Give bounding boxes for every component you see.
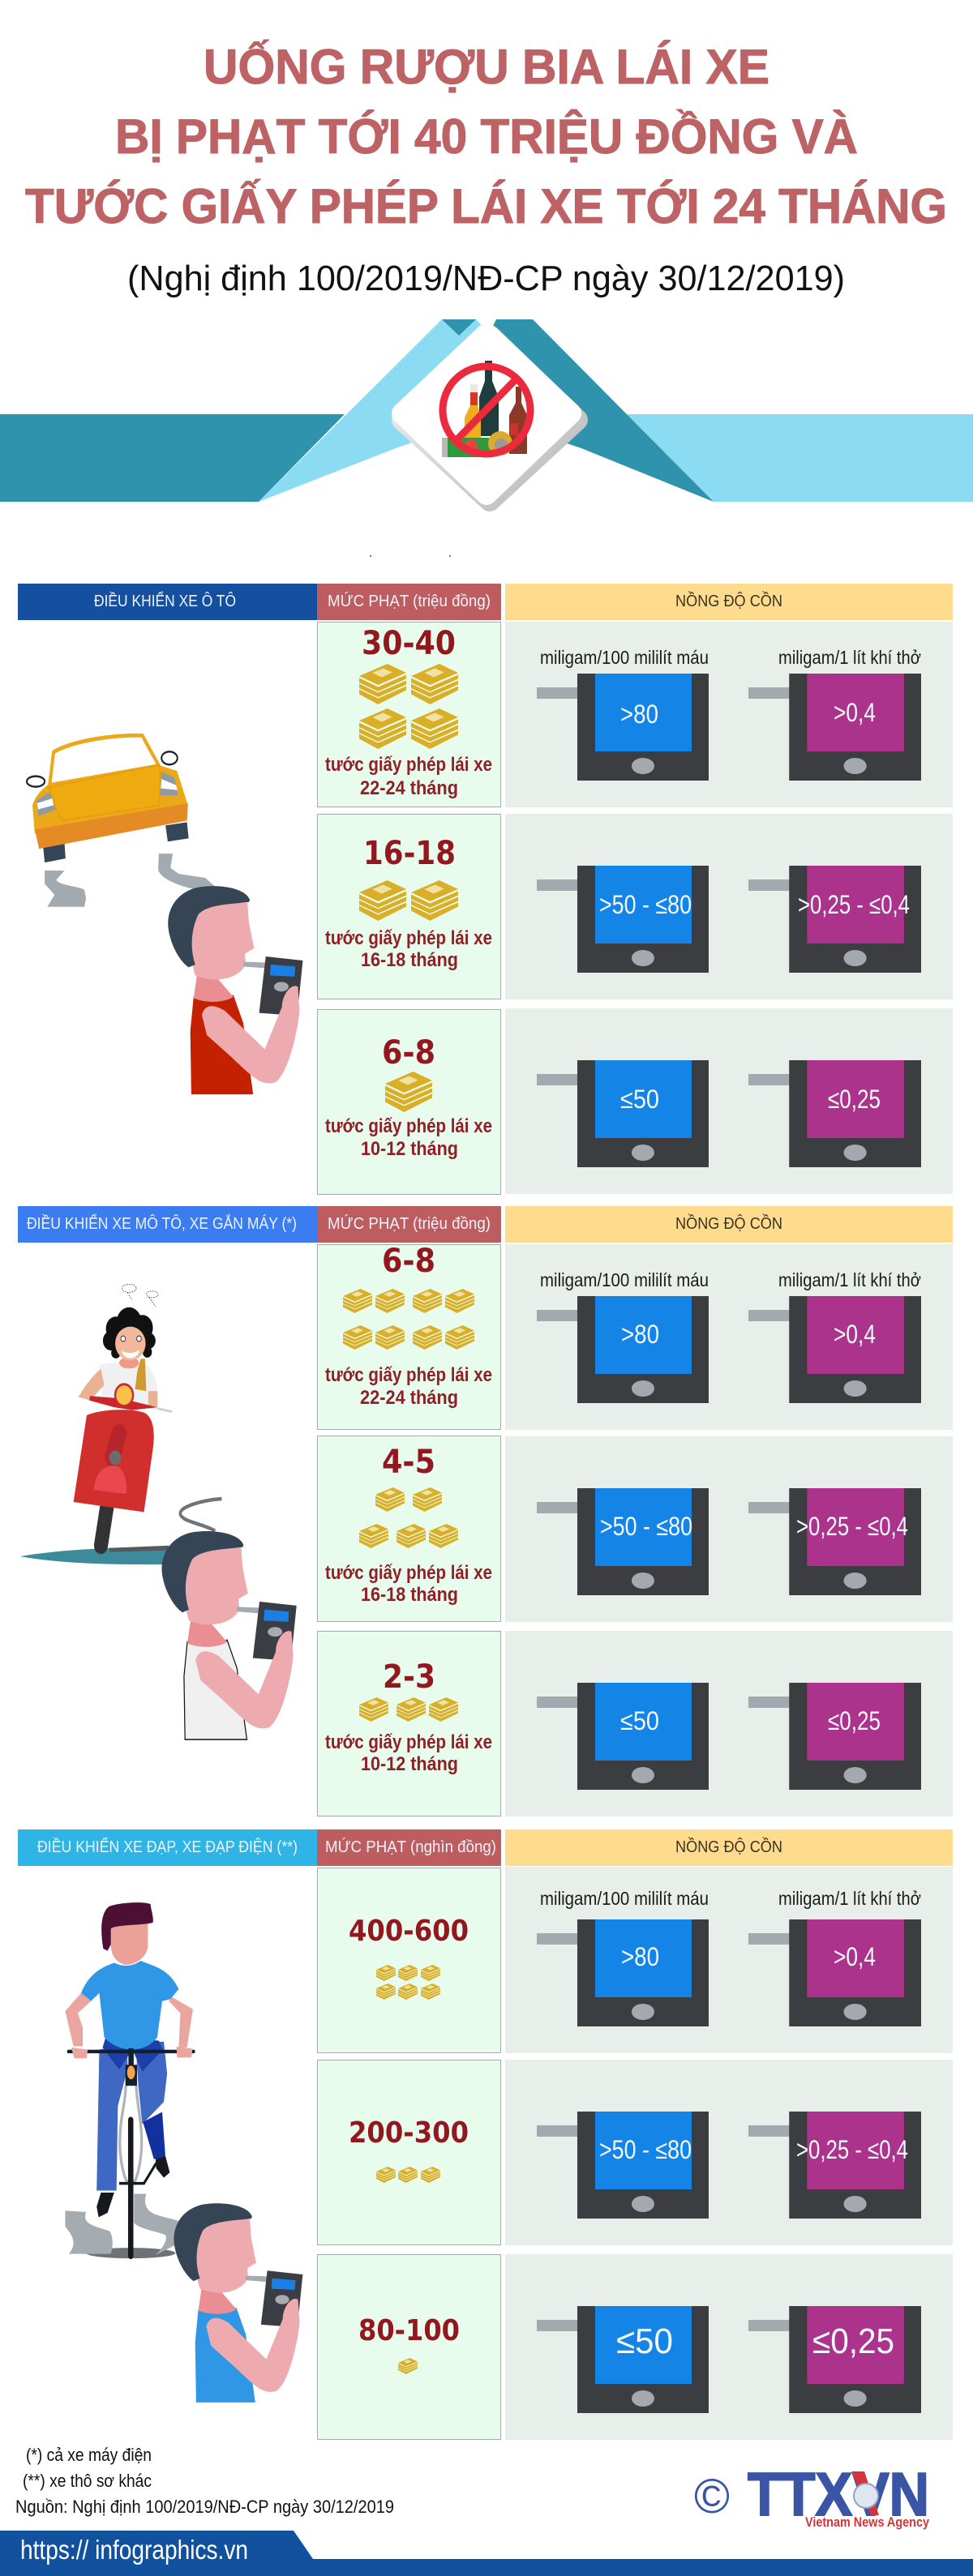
fine cell 2-3: tước giấy phép lái xe xyxy=(325,1731,492,1753)
alcohol panel >80 / >0,4: >0,4 xyxy=(834,698,876,727)
fine cell 30-40: 22-24 tháng xyxy=(360,777,458,799)
title xyxy=(25,40,947,233)
icon: no alcohol diamond xyxy=(402,334,577,501)
alcohol panel >80 / >0,4: miligam/1 lít khí thở xyxy=(778,647,921,668)
row: 200-300 xyxy=(318,2060,953,2245)
fine cell 4-5: 16-18 tháng xyxy=(361,1584,458,1606)
alcohol panel >80 / >0,4: miligam/100 mililít máu xyxy=(540,1269,709,1290)
alcohol panel >80 / >0,4: miligam/1 lít khí thở xyxy=(778,1888,921,1909)
footnotes and source xyxy=(15,2445,394,2517)
alcohol panel >80 / >0,4: miligam/100 mililít máu xyxy=(540,1888,709,1909)
header: xe mô tô: ĐIỀU KHIỂN XE MÔ TÔ, XE GẮN MÁY (*) xyxy=(27,1213,297,1233)
header: xe đạp xyxy=(18,1829,953,1866)
fine cell 200-300: 200-300 xyxy=(349,2116,469,2150)
alcohol panel >80 / >0,4 xyxy=(505,622,953,807)
fine cell 4-5 xyxy=(318,1436,501,1621)
footer bar xyxy=(0,2531,973,2576)
row: 80-100 xyxy=(318,2254,953,2440)
logo: TTXVN: TTXVN xyxy=(748,2460,929,2528)
section: xe ô tô xyxy=(18,584,953,1195)
fine cell 400-600 xyxy=(318,1868,501,2052)
alcohol panel ≤50 / ≤0,25: ≤0,25 xyxy=(828,1085,881,1114)
alcohol panel >80 / >0,4: >80 xyxy=(621,1320,659,1349)
alcohol panel >80 / >0,4: miligam/100 mililít máu xyxy=(540,647,709,668)
logo: TTXVN: © xyxy=(694,2469,730,2523)
row: 400-600 xyxy=(318,1867,953,2053)
header: xe ô tô: NỒNG ĐỘ CỒN xyxy=(675,591,782,610)
row: 6-8 xyxy=(318,1243,953,1430)
alcohol panel >50 / >0,25 xyxy=(505,1436,953,1622)
alcohol panel >80 / >0,4 xyxy=(505,1244,953,1430)
fine cell 80-100: 80-100 xyxy=(358,2314,460,2347)
alcohol panel >50 / >0,25 xyxy=(505,2060,953,2245)
alcohol panel >80 / >0,4: >80 xyxy=(620,700,658,729)
fine cell 80-100 xyxy=(318,2255,501,2440)
header: xe ô tô: ĐIỀU KHIỂN XE Ô TÔ xyxy=(94,592,236,610)
illustration: cyclist and breath test xyxy=(65,1902,302,2403)
alcohol panel ≤50 / ≤0,25 xyxy=(505,1008,953,1194)
alcohol panel ≤50 / ≤0,25 xyxy=(505,2254,953,2440)
banner ribbon xyxy=(0,319,973,502)
title: TƯỚC GIẤY PHÉP LÁI XE TỚI 24 THÁNG xyxy=(25,179,947,233)
fine cell 6-8: tước giấy phép lái xe xyxy=(325,1364,492,1386)
alcohol panel >80 / >0,4: >0,4 xyxy=(834,1320,876,1349)
fine cell 6-8: 6-8 xyxy=(382,1243,435,1280)
subtitle: (Nghị định 100/2019/NĐ-CP ngày 30/12/2019) xyxy=(127,259,845,298)
alcohol panel ≤50 / ≤0,25: ≤50 xyxy=(620,1706,659,1735)
row: 16-18 xyxy=(318,814,953,999)
fine cell 6-8: tước giấy phép lái xe xyxy=(325,1115,492,1137)
alcohol panel >50 / >0,25: >0,25 - ≤0,4 xyxy=(798,890,910,919)
alcohol panel >80 / >0,4: >0,4 xyxy=(834,1942,876,1971)
row: 4-5 xyxy=(318,1436,953,1622)
fine cell 6-8: 22-24 tháng xyxy=(360,1387,458,1409)
alcohol panel ≤50 / ≤0,25: ≤0,25 xyxy=(812,2321,894,2361)
illustration: car and breath test xyxy=(27,735,302,1094)
section: xe đạp xyxy=(18,1829,953,2440)
alcohol panel >50 / >0,25: >50 - ≤80 xyxy=(599,2135,692,2164)
alcohol panel >50 / >0,25: >0,25 - ≤0,4 xyxy=(796,2135,908,2164)
title: UỐNG RƯỢU BIA LÁI XE xyxy=(204,40,769,94)
header: xe đạp: MỨC PHẠT (nghìn đồng) xyxy=(325,1838,496,1856)
footnotes and source: Nguồn: Nghị định 100/2019/NĐ-CP ngày 30/12/2019 xyxy=(15,2497,394,2517)
fine cell 16-18: tước giấy phép lái xe xyxy=(325,927,492,949)
header: xe ô tô: MỨC PHẠT (triệu đồng) xyxy=(328,592,491,610)
alcohol panel ≤50 / ≤0,25 xyxy=(505,1631,953,1816)
fine cell 400-600: 400-600 xyxy=(349,1915,469,1948)
alcohol panel >80 / >0,4 xyxy=(505,1867,953,2053)
fine cell 2-3 xyxy=(318,1631,501,1816)
header: xe mô tô: MỨC PHẠT (triệu đồng) xyxy=(328,1214,491,1233)
alcohol panel >80 / >0,4: >80 xyxy=(621,1942,659,1971)
fine cell 16-18: 16-18 tháng xyxy=(361,949,458,971)
fine cell 2-3: 2-3 xyxy=(383,1658,435,1696)
alcohol panel ≤50 / ≤0,25: ≤0,25 xyxy=(828,1706,881,1735)
footnotes and source: (**) xe thô sơ khác xyxy=(23,2471,152,2491)
row: 6-8 xyxy=(318,1008,953,1195)
header: xe mô tô xyxy=(18,1206,953,1243)
header: xe đạp: ĐIỀU KHIỂN XE ĐẠP, XE ĐẠP ĐIỆN (**) xyxy=(37,1838,298,1856)
fine cell 6-8: 10-12 tháng xyxy=(361,1138,458,1160)
fine cell 200-300 xyxy=(318,2060,501,2245)
alcohol panel >50 / >0,25 xyxy=(505,814,953,999)
alcohol panel >50 / >0,25: >50 - ≤80 xyxy=(599,890,692,919)
alcohol panel >80 / >0,4: miligam/1 lít khí thở xyxy=(778,1269,921,1290)
fine cell 2-3: 10-12 tháng xyxy=(361,1753,458,1775)
fine cell 30-40 xyxy=(318,623,501,807)
footer bar: https:// infographics.vn xyxy=(20,2535,248,2565)
fine cell 6-8: 6-8 xyxy=(382,1034,435,1072)
fine cell 16-18 xyxy=(318,814,501,999)
alcohol panel ≤50 / ≤0,25: ≤50 xyxy=(620,1085,659,1114)
illustration: scooter and breath test xyxy=(19,1284,297,1739)
fine cell 30-40: 30-40 xyxy=(362,625,456,662)
header: xe đạp: NỒNG ĐỘ CỒN xyxy=(675,1837,782,1856)
fine cell 6-8 xyxy=(318,1243,501,1430)
fine cell 30-40: tước giấy phép lái xe xyxy=(325,754,492,776)
fine cell 16-18: 16-18 xyxy=(363,835,456,872)
row: 2-3 xyxy=(318,1631,953,1816)
row: 30-40 xyxy=(318,622,953,807)
fine cell 4-5: 4-5 xyxy=(382,1444,435,1481)
alcohol panel >50 / >0,25: >50 - ≤80 xyxy=(600,1512,692,1541)
fine cell 6-8 xyxy=(318,1010,501,1195)
section: xe mô tô xyxy=(18,1206,953,1816)
header: xe ô tô xyxy=(18,584,953,620)
header: xe mô tô: NỒNG ĐỘ CỒN xyxy=(675,1213,782,1233)
alcohol panel ≤50 / ≤0,25: ≤50 xyxy=(616,2321,673,2361)
logo: TTXVN: Vietnam News Agency xyxy=(805,2514,929,2530)
fine cell 4-5: tước giấy phép lái xe xyxy=(325,1562,492,1584)
footnotes and source: (*) cả xe máy điện xyxy=(26,2445,152,2465)
alcohol panel >50 / >0,25: >0,25 - ≤0,4 xyxy=(796,1512,908,1541)
title: BỊ PHẠT TỚI 40 TRIỆU ĐỒNG VÀ xyxy=(115,109,858,164)
